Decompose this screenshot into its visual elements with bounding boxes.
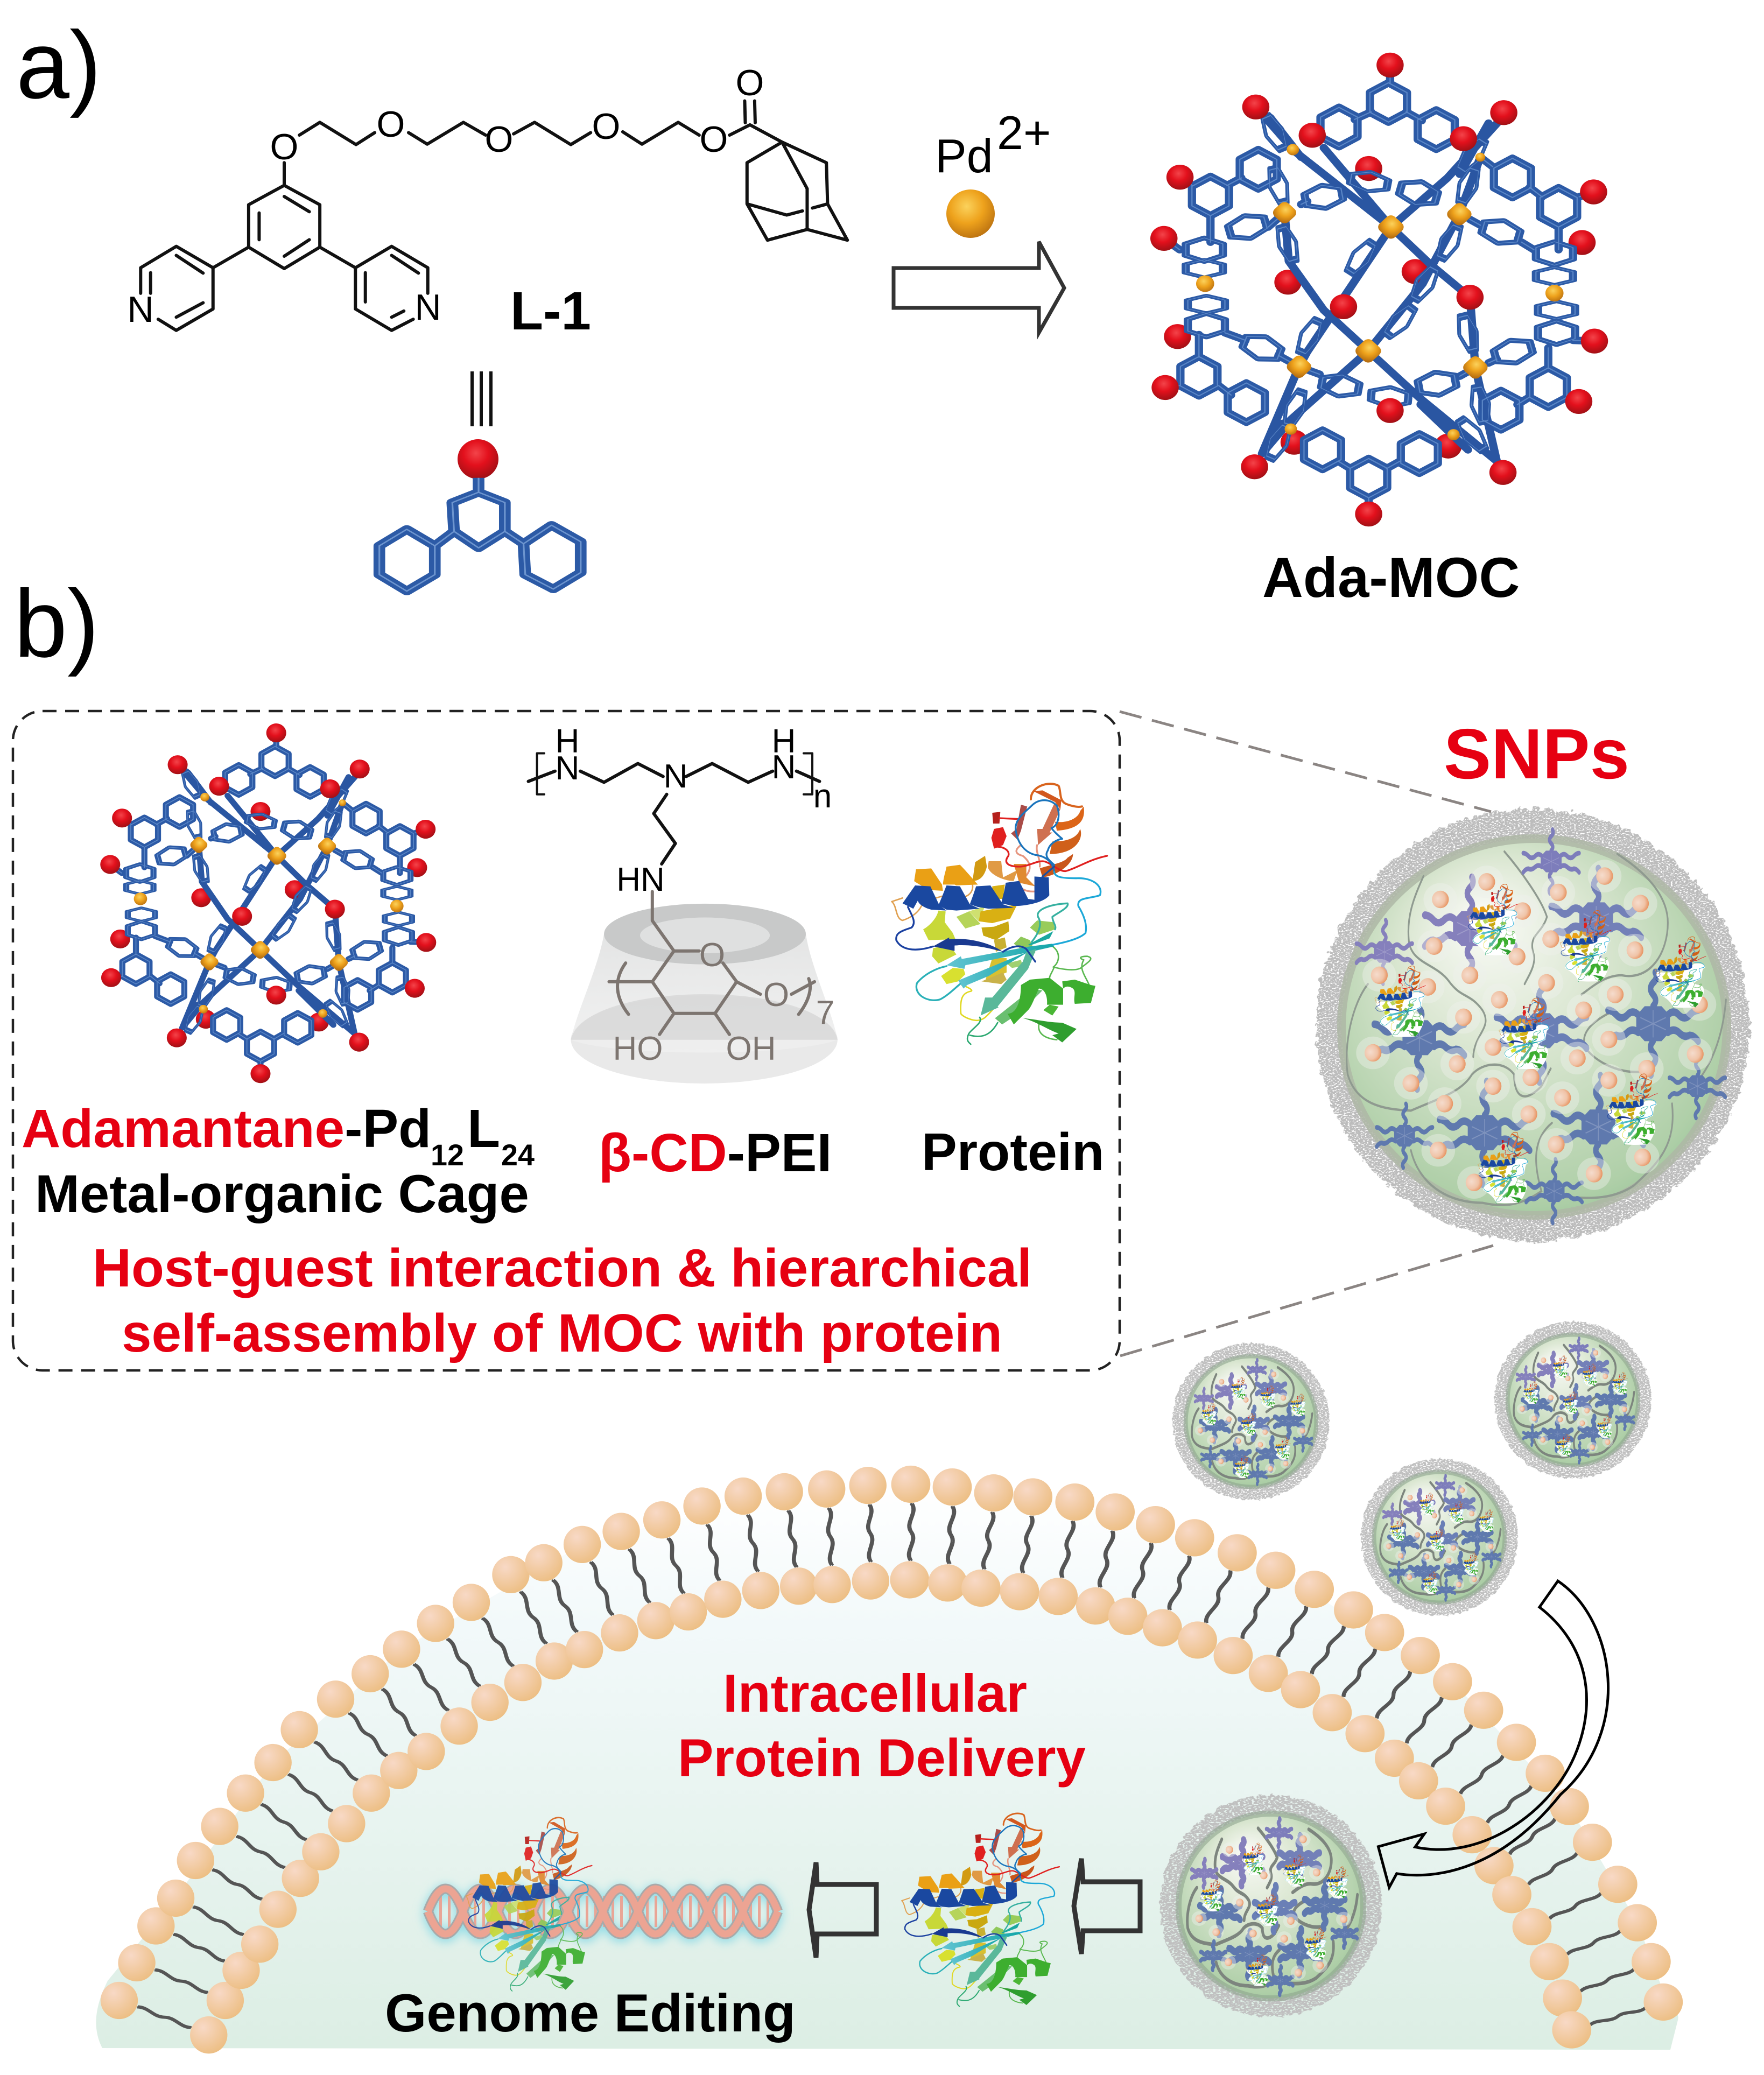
structure: beta-CD-PEI: n bbox=[813, 778, 832, 815]
icon: DNA double helix bbox=[428, 1889, 778, 1936]
structure: ligand L-1 bbox=[127, 62, 847, 330]
nanoparticle: large SNP detail bbox=[1317, 808, 1749, 1241]
arrow: to genome editing bbox=[809, 1862, 876, 1958]
icon: simplified ligand model bbox=[379, 439, 581, 591]
structure: beta-CD-PEI: 7 bbox=[816, 994, 834, 1031]
label: Protein: Protein bbox=[922, 1122, 1104, 1181]
model: protein on DNA bbox=[466, 1818, 592, 1991]
cell interior bbox=[96, 1486, 1678, 2050]
heading: Genome Editing: Genome Editing bbox=[385, 1983, 796, 2043]
nanoparticle: outside cell, right bbox=[1494, 1321, 1651, 1479]
model: Ada-MOC cage bbox=[1150, 53, 1608, 526]
label: Pd 2+: Pd bbox=[935, 129, 993, 182]
structure: ligand L-1: O bbox=[270, 126, 298, 167]
structure: beta-CD-PEI: HN bbox=[616, 861, 665, 898]
label: Adamantane-Pd12L24: Adamantane-Pd bbox=[22, 1099, 431, 1159]
label: Pd 2+: 2+ bbox=[997, 106, 1051, 159]
structure: beta-CD-PEI bbox=[528, 723, 838, 1084]
label: Adamantane-Pd12L24: 12 bbox=[431, 1138, 464, 1172]
model: released protein bbox=[902, 1813, 1059, 2007]
structure: ligand L-1: O bbox=[485, 119, 513, 160]
arrow: self-assembly bbox=[894, 242, 1064, 333]
label: Adamantane-Pd12L24 bbox=[22, 1099, 535, 1172]
membrane: lipid bilayer bbox=[101, 1466, 1683, 2053]
structure: beta-CD-PEI: H bbox=[556, 723, 579, 760]
structure: beta-CD-PEI: HO bbox=[613, 1030, 663, 1067]
heading: Intracellular: Intracellular bbox=[723, 1663, 1027, 1723]
triple-bar equivalence sign bbox=[472, 371, 491, 426]
structure: beta-CD-PEI: N bbox=[664, 758, 687, 795]
label: beta-CD-PEI: β-CD-PEI bbox=[599, 1123, 832, 1183]
structure: beta-CD-PEI: N bbox=[772, 749, 796, 786]
model: protein bbox=[892, 784, 1107, 1044]
nanoparticle: inside cell bbox=[1160, 1795, 1382, 2017]
label: Adamantane-Pd12L24: 24 bbox=[501, 1138, 535, 1172]
structure: ligand L-1: O bbox=[700, 119, 728, 160]
structure: beta-CD-PEI: O bbox=[763, 976, 789, 1014]
panel: components of the assembly bbox=[13, 711, 1120, 1370]
structure: ligand L-1: O bbox=[592, 106, 620, 147]
icon: palladium ball bbox=[946, 189, 995, 238]
heading: SNPs: SNPs bbox=[1444, 714, 1629, 793]
zoom connector lines bbox=[1120, 712, 1493, 1356]
panel label b: b) bbox=[14, 570, 99, 677]
model: Adamantane-Pd12L24 cage bbox=[100, 723, 436, 1083]
structure: beta-CD-PEI: OH bbox=[726, 1030, 776, 1067]
structure: beta-CD-PEI: O bbox=[699, 937, 725, 974]
caption line 2: self-assembly of MOC with protein bbox=[122, 1303, 1002, 1363]
label: L-1: L-1 bbox=[510, 281, 591, 341]
caption line 1: Host-guest interaction & hierarchical bbox=[93, 1238, 1032, 1298]
label: Adamantane-Pd12L24: L bbox=[467, 1099, 500, 1159]
structure: ligand L-1: N bbox=[414, 287, 441, 328]
heading: Protein Delivery: Protein Delivery bbox=[678, 1728, 1086, 1788]
structure: ligand L-1: O bbox=[736, 62, 764, 103]
structure: beta-CD-PEI: H bbox=[772, 723, 796, 760]
nanoparticle: outside cell, left bbox=[1172, 1343, 1330, 1500]
label: Metal-organic Cage: Metal-organic Cage bbox=[35, 1164, 529, 1224]
nanoparticle: entering cell bbox=[1361, 1459, 1518, 1616]
arrow: protein release bbox=[1074, 1859, 1140, 1954]
label: Ada-MOC: Ada-MOC bbox=[1262, 546, 1520, 609]
structure: ligand L-1: O bbox=[377, 104, 405, 145]
arrow: cellular uptake bbox=[1378, 1581, 1608, 1888]
structure: ligand L-1: N bbox=[127, 289, 154, 330]
structure: beta-CD-PEI: N bbox=[556, 750, 579, 787]
panel label a: a) bbox=[16, 11, 101, 118]
